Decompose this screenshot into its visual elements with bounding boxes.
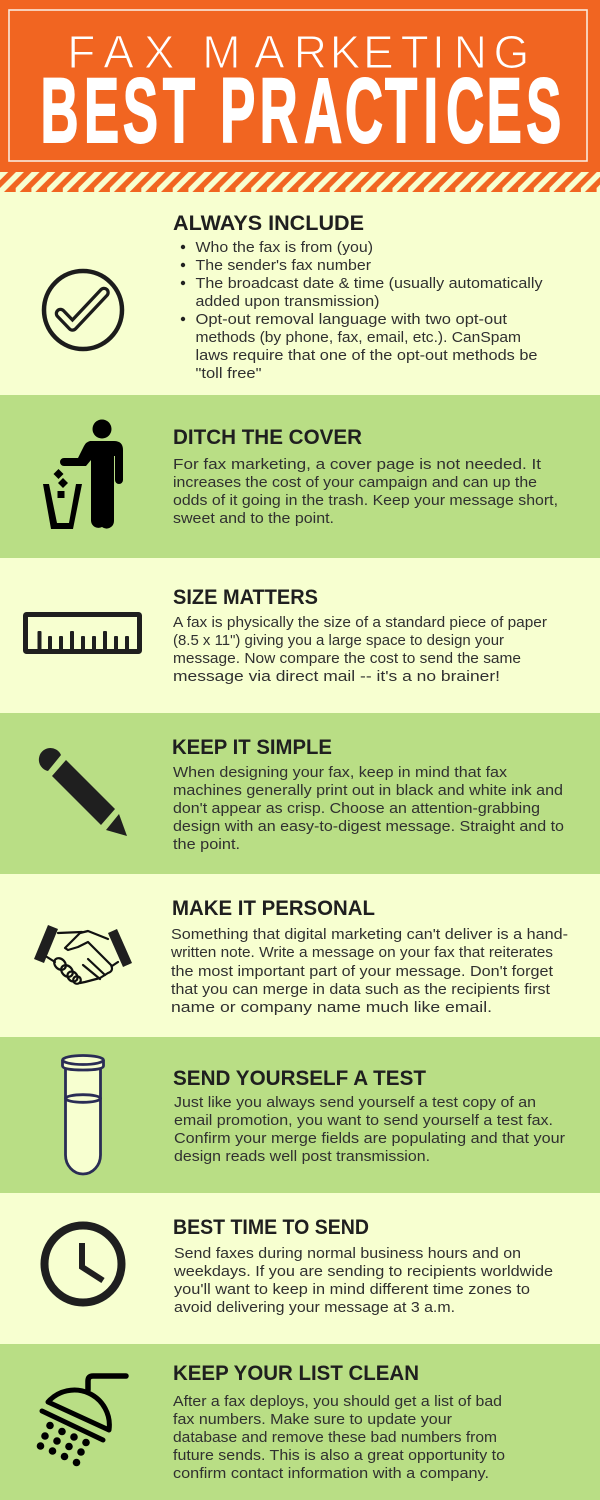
panel: make it personal xyxy=(34,897,568,1016)
body text: the most important part of your message. Don't forget xyxy=(171,963,554,980)
icon: ruler xyxy=(26,614,140,652)
body text: machines generally print out in black and white ink and xyxy=(173,782,563,799)
body text: written note. Write a message on your fax that reiterates xyxy=(170,944,553,961)
bullet list: The sender's fax number xyxy=(196,257,371,274)
body text: message via direct mail -- it's a no brainer! xyxy=(173,668,500,685)
heading: SIZE MATTERS xyxy=(173,586,318,609)
icon: person using trash bin xyxy=(43,420,123,529)
body text: future sends. This is also a great opportunity to xyxy=(173,1447,505,1464)
title line: best practices: BEST PRACTICES xyxy=(40,59,561,162)
body text: Send faxes during normal business hours and on xyxy=(174,1245,521,1262)
body text xyxy=(173,764,564,853)
panel: send yourself a test xyxy=(62,1056,565,1174)
body text xyxy=(173,614,547,685)
body text: weekdays. If you are sending to recipients worldwide xyxy=(173,1263,553,1280)
body text: avoid delivering your message at 3 a.m. xyxy=(174,1299,455,1316)
icon: clock xyxy=(44,1226,122,1302)
icon: handshake xyxy=(34,925,132,984)
body text: design reads well post transmission. xyxy=(174,1148,430,1165)
body text xyxy=(170,926,568,1016)
body text: increases the cost of your campaign and can up the xyxy=(173,474,537,491)
bullet list: Opt-out removal language with two opt-out xyxy=(196,311,508,328)
body text: Confirm your merge fields are populating and that your xyxy=(174,1130,565,1147)
panel: ditch the cover xyxy=(43,420,558,529)
body text: Something that digital marketing can't deliver is a hand- xyxy=(171,926,568,943)
body text: email promotion, you want to send yourself a test fax. xyxy=(174,1112,553,1129)
bullet list: "toll free" xyxy=(196,365,262,382)
body text xyxy=(173,1393,505,1482)
body text: the point. xyxy=(173,836,240,853)
bullet list: The broadcast date & time (usually automatically xyxy=(196,275,543,292)
body text: database and remove these bad numbers from xyxy=(173,1429,497,1446)
panel: keep your list clean xyxy=(37,1362,505,1482)
heading: BEST TIME TO SEND xyxy=(173,1216,369,1239)
body text: A fax is physically the size of a standard piece of paper xyxy=(173,614,547,631)
body text xyxy=(174,1094,565,1165)
body text: After a fax deploys, you should get a list of bad xyxy=(173,1393,502,1410)
striped divider xyxy=(0,172,600,192)
body text: message. Now compare the cost to send the same xyxy=(173,650,521,667)
panel: keep it simple xyxy=(39,736,564,853)
bullet list: laws require that one of the opt-out methods be xyxy=(196,347,538,364)
heading: MAKE IT PERSONAL xyxy=(172,897,375,920)
icon: pencil xyxy=(39,748,127,836)
bullet list: Who the fax is from (you) xyxy=(196,239,373,256)
body text: you'll want to keep in mind different time zones to xyxy=(174,1281,530,1298)
panel: size matters xyxy=(26,586,547,685)
heading: ALWAYS INCLUDE xyxy=(173,212,364,235)
title banner xyxy=(0,0,600,172)
body text: Just like you always send yourself a test copy of an xyxy=(174,1094,536,1111)
heading: KEEP YOUR LIST CLEAN xyxy=(173,1362,419,1385)
panel: always include xyxy=(44,212,543,382)
heading: DITCH THE COVER xyxy=(173,426,362,449)
body text: that you can merge in data such as the recipients first xyxy=(171,981,551,998)
heading: KEEP IT SIMPLE xyxy=(172,736,332,759)
bullet list: methods (by phone, fax, email, etc.). CanSpam xyxy=(196,329,521,346)
body text: For fax marketing, a cover page is not needed. It xyxy=(173,456,542,473)
body text: design with an easy-to-digest message. Straight and to xyxy=(173,818,564,835)
icon: test tube xyxy=(62,1056,104,1174)
body text: When designing your fax, keep in mind that fax xyxy=(173,764,508,781)
body text: fax numbers. Make sure to update your xyxy=(173,1411,452,1428)
title line: fax marketing: FAX MARKETING xyxy=(67,26,529,78)
body text: don't appear as crisp. Choose an attention-grabbing xyxy=(173,800,540,817)
icon: shower head xyxy=(37,1376,126,1466)
body text: confirm contact information with a company. xyxy=(173,1465,489,1482)
body text: (8.5 x 11") giving you a large space to design your xyxy=(173,632,504,649)
bullet list: added upon transmission) xyxy=(196,293,380,310)
body text: sweet and to the point. xyxy=(173,510,334,527)
heading: SEND YOURSELF A TEST xyxy=(173,1067,426,1090)
body text: name or company name much like email. xyxy=(171,999,492,1016)
body text: odds of it going in the trash. Keep your message short, xyxy=(173,492,558,509)
panel: best time to send xyxy=(44,1216,553,1316)
body text xyxy=(173,456,558,527)
body text xyxy=(173,1245,553,1316)
bullet list xyxy=(181,239,543,382)
icon: check mark in circle xyxy=(44,271,122,349)
